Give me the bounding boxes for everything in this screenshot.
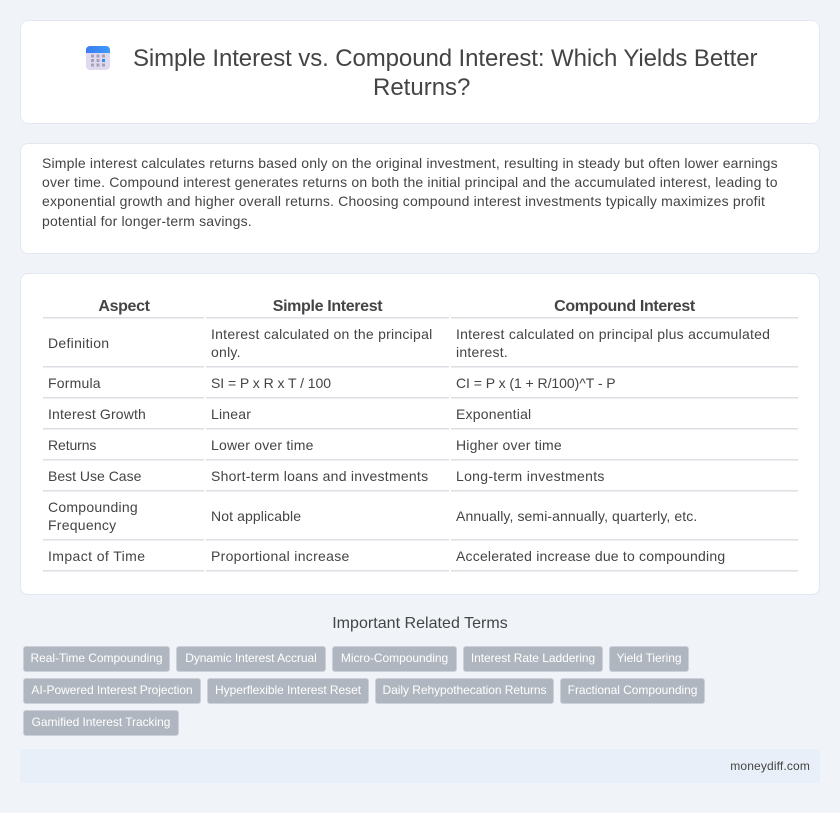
- related term tags: Yield Tiering: [617, 651, 681, 665]
- icon: calendar: [86, 46, 110, 70]
- related term tags: AI-Powered Interest Projection: [31, 683, 193, 697]
- comparison table: CI = P x (1 + R/100)^T - P: [456, 375, 616, 391]
- comparison table: Interest Growth: [48, 406, 146, 422]
- comparison table: Compound Interest: [554, 298, 695, 315]
- comparison table: Returns: [48, 437, 96, 453]
- comparison table: Proportional increase: [211, 548, 350, 564]
- title: Simple Interest vs. Compound Interest: Which Yields Better: [133, 45, 757, 72]
- related term tags: Dynamic Interest Accrual: [185, 651, 317, 665]
- panel: header card: [20, 20, 820, 124]
- summary text: Simple interest calculates returns based only on the original investment, resulting in steady but often lower earnings: [42, 155, 778, 171]
- comparison table: [43, 298, 798, 572]
- title: Returns?: [373, 74, 470, 101]
- comparison table: Lower over time: [211, 437, 314, 453]
- related term tags: Interest Rate Laddering: [471, 651, 595, 665]
- related term tags: Real-Time Compounding: [31, 651, 162, 665]
- comparison table: Aspect: [98, 298, 150, 315]
- comparison table: Frequency: [48, 517, 116, 533]
- panel: summary card: [20, 143, 820, 254]
- panel: comparison table card: [20, 273, 820, 595]
- comparison table: Accelerated increase due to compounding: [456, 548, 725, 564]
- comparison table: Best Use Case: [48, 468, 141, 484]
- comparison table: Annually, semi-annually, quarterly, etc.: [456, 508, 697, 524]
- comparison table: Short-term loans and investments: [211, 468, 428, 484]
- comparison table: SI = P x R x T / 100: [211, 375, 331, 391]
- comparison table: only.: [211, 344, 241, 360]
- comparison table: interest.: [456, 344, 508, 360]
- comparison table: Linear: [211, 406, 251, 422]
- comparison table: Interest calculated on the principal: [211, 326, 432, 342]
- comparison table: Higher over time: [456, 437, 562, 453]
- heading: important related terms: Important Related Terms: [332, 615, 508, 632]
- comparison table: Definition: [48, 335, 109, 351]
- title: [133, 45, 758, 101]
- related term tags: [23, 646, 705, 736]
- footer bar: moneydiff.com: [730, 759, 810, 773]
- comparison table: Not applicable: [211, 508, 301, 524]
- comparison table: Impact of Time: [48, 548, 145, 564]
- comparison table: Compounding: [48, 499, 138, 515]
- related term tags: Hyperflexible Interest Reset: [215, 683, 361, 697]
- summary text: exponential growth and higher overall returns. Choosing compound interest investments typically maximizes profit: [42, 193, 765, 209]
- related term tags: Micro-Compounding: [341, 651, 448, 665]
- related term tags: Daily Rehypothecation Returns: [382, 683, 546, 697]
- summary text: potential for longer-term savings.: [42, 213, 252, 229]
- comparison table: Exponential: [456, 406, 531, 422]
- summary text: [42, 155, 778, 229]
- summary text: over time. Compound interest generates returns on both the initial principal and the accumulated interest, leading to: [42, 174, 778, 190]
- footer bar: [20, 749, 820, 783]
- comparison table: Simple Interest: [273, 298, 382, 315]
- related term tags: Fractional Compounding: [568, 683, 697, 697]
- comparison table: Long-term investments: [456, 468, 605, 484]
- comparison table: Formula: [48, 375, 101, 391]
- related term tags: Gamified Interest Tracking: [32, 715, 170, 729]
- comparison table: Interest calculated on principal plus accumulated: [456, 326, 770, 342]
